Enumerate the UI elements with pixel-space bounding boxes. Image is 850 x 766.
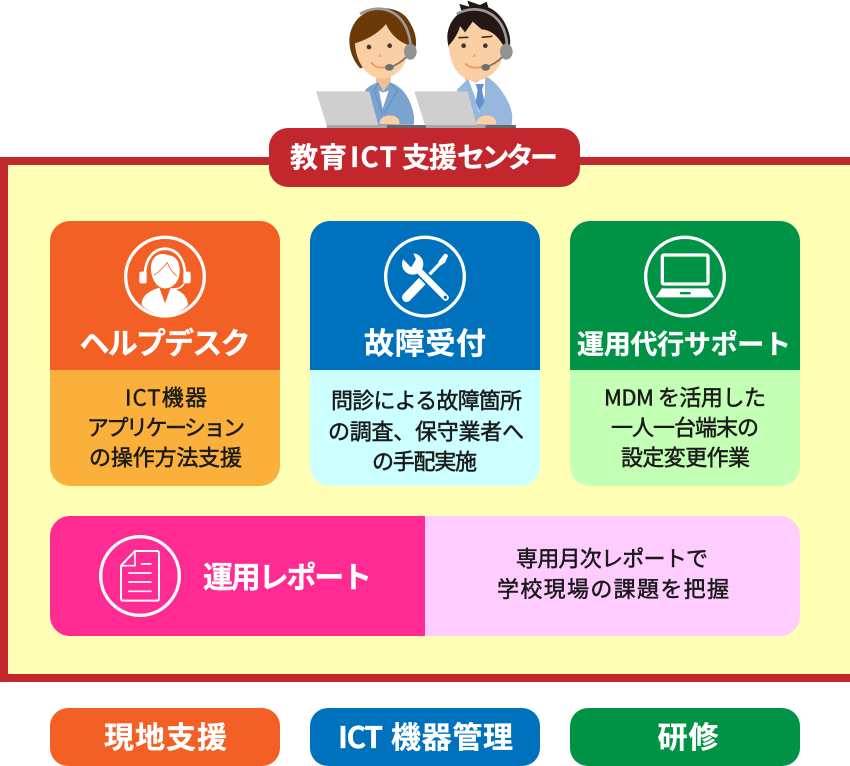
- description: の調査、保守業者へ: [328, 414, 524, 446]
- woman operator: [349, 8, 417, 125]
- laptops and hands: [316, 91, 516, 129]
- description: [328, 384, 524, 476]
- heading: center name badge: ICT: [350, 136, 397, 176]
- description: アプリケーション: [87, 410, 245, 442]
- description: ICT機器: [125, 380, 207, 412]
- title: 運用レポート: [203, 553, 372, 597]
- button: training: 研修: [658, 713, 718, 757]
- man operator: [447, 1, 513, 125]
- panel: help desk: [50, 221, 280, 486]
- description: 問診による故障箇所: [331, 384, 522, 416]
- title: 故障受付: [364, 319, 486, 363]
- description: [604, 380, 766, 472]
- description: MDM を活用した: [604, 380, 766, 412]
- button: on-site support: 現地支援: [104, 713, 227, 757]
- button: ICT equipment management: [310, 708, 540, 766]
- icon: laptop: [646, 237, 724, 316]
- icon: document: [101, 537, 179, 615]
- panel: operation report: [50, 516, 800, 636]
- description: の操作方法支援: [89, 440, 242, 472]
- heading: center name badge: [269, 128, 580, 187]
- icon: wrench and screwdriver: [386, 237, 464, 316]
- panel: support center frame: [4, 161, 850, 678]
- heading: center name badge: センター: [457, 136, 558, 176]
- description: 専用月次レポートで: [516, 542, 708, 574]
- title: 運用代行サポート: [577, 323, 791, 362]
- panel: operation support: [570, 221, 800, 486]
- description: の手配実施: [372, 444, 477, 476]
- description: [87, 380, 245, 472]
- heading: center name badge: 支援: [402, 136, 457, 176]
- description: 学校現場の課題を把握: [497, 572, 729, 604]
- illustration: two operators with laptops: [316, 1, 516, 129]
- button: ICT equipment management: ICT: [338, 713, 383, 757]
- title: ヘルプデスク: [80, 319, 250, 363]
- button: ICT equipment management: 機器管理: [391, 713, 513, 757]
- description: 一人一台端末の: [611, 410, 759, 442]
- heading: center name badge: 教育: [290, 136, 347, 176]
- icon: operator with headset: [126, 237, 204, 316]
- description: [497, 542, 729, 604]
- panel: failure reception: [310, 221, 540, 486]
- description: 設定変更作業: [621, 440, 750, 472]
- button: training: [570, 708, 800, 766]
- button: on-site support: [50, 708, 280, 766]
